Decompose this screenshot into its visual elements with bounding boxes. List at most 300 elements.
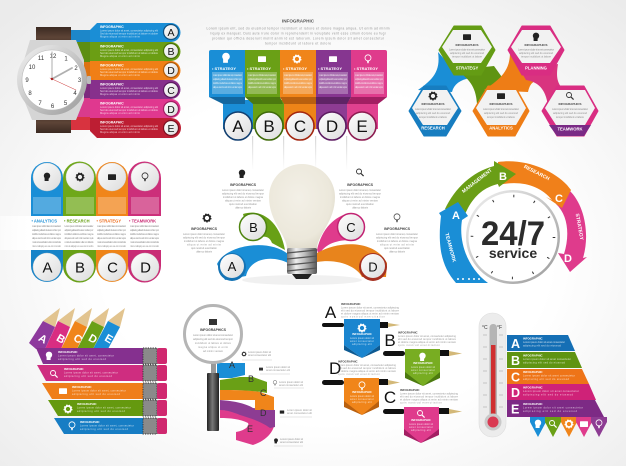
hexagon strategy: INFOGRAPHICS xyxy=(455,43,479,47)
thermometer body xyxy=(479,313,506,437)
text block bulb xyxy=(376,214,418,254)
ribbon B: B xyxy=(249,220,258,235)
column E: • STRATEGY xyxy=(354,66,378,71)
column C: Lorem ipsum dolor sit amet, consectetur xyxy=(284,73,312,77)
column A: • STRATEGY xyxy=(212,66,236,71)
band text: Lorem ipsum dolor sit amet consectetur xyxy=(97,224,126,228)
text block A xyxy=(341,302,400,318)
hexagon planning: tempor incididunt ut labore xyxy=(521,54,552,58)
column D: Lorem ipsum dolor sit amet, consectetur xyxy=(319,73,347,77)
watch dial numbers: 2 xyxy=(74,66,78,72)
band headings: • TEAMWORK xyxy=(129,218,156,224)
text block bulb: incididunt ut labore et dolore magna xyxy=(377,239,418,243)
watch dial numbers: 11 xyxy=(38,56,45,62)
pink ribbon D: INFOGRAPHIC xyxy=(100,102,124,106)
fading shadows below tabs xyxy=(252,136,347,170)
watch dial numbers: 9 xyxy=(25,78,29,84)
hexagon research: RESEARCH xyxy=(421,126,445,130)
letter badges: D xyxy=(167,65,175,77)
intro text: tempor incididunt ut labore et dolore xyxy=(265,42,331,46)
hexagon research: Lorem ipsum dolor sit amet consectetur xyxy=(415,107,451,111)
column C: aliqua ut enim ad minim veniam quis xyxy=(284,85,313,89)
band text xyxy=(32,224,160,248)
ribbon E: E xyxy=(511,402,519,416)
text block A: elit sed do eiusmod tempor incididunt ut labore xyxy=(341,308,400,312)
ribbon green xyxy=(220,377,267,393)
text block B: quis nostrud exercitation xyxy=(398,343,441,347)
banner C: Lorem ipsum dolor sit xyxy=(409,422,433,426)
label 5: Lorem ipsum dolor sit xyxy=(280,437,303,441)
panel: magnifier with stepped ribbons xyxy=(184,306,312,446)
banner B: Lorem ipsum dolor sit xyxy=(411,365,435,369)
ribbon A xyxy=(507,335,575,351)
hexagon teamwork: INFOGRAPHICS xyxy=(558,102,582,106)
ribbon letters xyxy=(229,360,267,434)
label 4 xyxy=(280,408,312,417)
letter D: D xyxy=(329,359,341,378)
orange ribbon D xyxy=(90,61,180,80)
text block gear xyxy=(183,214,225,254)
hexagon analytics: Lorem ipsum dolor sit amet consectetur xyxy=(483,107,519,111)
ribbon A xyxy=(217,245,288,281)
band text: nisi ut aliquip ex ea commodo xyxy=(130,244,160,248)
text block C: INFOGRAPHIC xyxy=(400,388,420,392)
ribbon letters: C xyxy=(260,388,267,398)
ribbon B xyxy=(507,352,582,368)
ribbon E xyxy=(507,400,604,417)
label 5: amet consectetur elit xyxy=(280,440,303,444)
letters xyxy=(42,260,151,276)
band text: nostrud exercitation ullamco laboris xyxy=(64,240,94,244)
bar orange xyxy=(42,383,143,399)
pen C xyxy=(383,408,462,414)
metal ferrules xyxy=(143,348,157,434)
orange ribbon D: Magna aliqua ut enim ad minim xyxy=(100,73,140,77)
banner D: amet consectetur xyxy=(350,397,374,401)
text block C: quis nostrud exercitation xyxy=(400,400,443,404)
bar green: INFOGRAPHIC xyxy=(77,402,97,406)
pink ribbon D: Lorem ipsum dolor sit amet, consectetur adipiscing elit xyxy=(100,105,158,109)
ribbon research C: C xyxy=(555,193,563,205)
watch dial numbers xyxy=(25,54,82,110)
text block C: et dolore magna aliqua ut enim ad minim veniam xyxy=(400,398,458,402)
band text: aliqua ut enim ad minim veniam quis xyxy=(64,236,94,240)
pill text blocks xyxy=(33,197,159,214)
text block A: quis nostrud exercitation xyxy=(341,314,386,318)
text block C: Lorem ipsum dolor sit amet, consectetur adipiscing xyxy=(400,392,459,396)
band text: adipiscing elit sed do eiusmod tempor xyxy=(130,228,159,232)
ribbon orange xyxy=(220,390,274,410)
text block B xyxy=(398,330,457,347)
ribbon A: A xyxy=(228,259,237,274)
band text: aliqua ut enim ad minim veniam quis xyxy=(130,236,160,240)
ribbon purple xyxy=(220,400,275,428)
ribbon letters: B xyxy=(248,374,254,384)
pencil D: D xyxy=(86,332,99,347)
text block B: et dolore magna aliqua ut enim ad minim veniam xyxy=(398,340,456,344)
ribbon D: INFOGRAPHIC xyxy=(523,386,543,390)
band text: aliqua ut enim ad minim veniam quis xyxy=(32,236,62,240)
band text: Lorem ipsum dolor sit amet consectetur xyxy=(130,224,159,228)
band text: nisi ut aliquip ex ea commodo xyxy=(32,244,62,248)
orange ribbon D: INFOGRAPHIC xyxy=(100,64,124,68)
letters: D xyxy=(140,260,151,276)
label 4: amet consectetur elit xyxy=(287,411,312,415)
bulb glass xyxy=(269,164,335,249)
bar blue: Lorem ipsum dolor sit amet, consectetur xyxy=(80,424,134,428)
text block gear: ullamco laboris xyxy=(196,250,213,254)
orange ribbon D: Lorem ipsum dolor sit amet, consectetur adipiscing elit xyxy=(100,67,158,71)
ribbon D: D xyxy=(368,260,378,274)
banner C xyxy=(404,407,439,443)
text block B: Lorem ipsum dolor sit amet, consectetur adipiscing xyxy=(398,334,457,338)
orange ribbon D: Sed do eiusmod tempor incididunt ut labore et dolore xyxy=(100,70,159,74)
intro text: proiden qui officia deserunt mollit anim id est laborum. Lorem ipsum dolor sit amet consectetur xyxy=(212,36,385,40)
bar orange: Lorem ipsum dolor sit amet, consectetur xyxy=(72,388,126,392)
band headings: • RESEARCH xyxy=(64,218,90,224)
bar pink: Lorem ipsum dolor sit amet, consectetur xyxy=(64,370,118,374)
text block gear: aliqua ut enim ad minim xyxy=(187,242,221,246)
letters: C xyxy=(107,260,118,276)
hexagon strategy: tempor incididunt ut labore xyxy=(452,54,483,58)
column folds xyxy=(209,97,387,104)
blue ribbon A: Lorem ipsum dolor sit amet, consectetur adipiscing elit xyxy=(100,28,158,32)
ribbon strategy D xyxy=(556,190,587,272)
ribbon E: INFOGRAPHIC xyxy=(523,402,543,406)
ribbon C: C xyxy=(346,220,356,235)
letters: B xyxy=(263,117,275,136)
text block gear: adipiscing elit sed do eiusmod tempor xyxy=(183,236,225,240)
bar purple: INFOGRAPHIC xyxy=(58,350,78,354)
bar blue: INFOGRAPHIC xyxy=(80,420,100,424)
ribbon C: Lorem ipsum dolor sit amet consectetur xyxy=(523,374,575,378)
bulb screw base xyxy=(287,248,317,279)
text block A: Lorem ipsum dolor sit amet, consectetur adipiscing xyxy=(341,306,400,310)
magnifier lens xyxy=(184,306,242,362)
ribbon B: B xyxy=(511,354,520,368)
band text: adipiscing elit sed do eiusmod tempor xyxy=(32,228,61,232)
magnifier lens: magna aliqua ut enim xyxy=(198,345,228,349)
lower tabs xyxy=(223,100,378,129)
watch dial numbers: 7 xyxy=(38,101,42,107)
red ribbon E: Magna aliqua ut enim ad minim xyxy=(100,130,140,134)
label 5 xyxy=(274,437,303,446)
hexagon teamwork xyxy=(542,86,598,136)
text block magnifier: Lorem ipsum dolor sit amet, consectetur xyxy=(339,188,381,192)
hexagon strategy: STRATEGY xyxy=(456,66,478,70)
letter B: B xyxy=(384,331,396,350)
column A: adipiscing elit sed do eiusmod tempor xyxy=(213,77,242,81)
ribbon A: adipiscing elit sed do eiusmod xyxy=(523,344,562,348)
hexagon strategy: adipiscing elit sed do eiusmod xyxy=(450,51,485,55)
letters: A xyxy=(42,260,53,276)
text block bulb: adipiscing elit sed do eiusmod tempor xyxy=(376,236,418,240)
text block D: INFOGRAPHIC xyxy=(338,360,358,364)
letter A: A xyxy=(325,303,337,322)
banner A: amet consectetur xyxy=(350,339,374,343)
ribbon research C xyxy=(498,161,571,208)
ribbon C xyxy=(507,369,589,384)
letter circles xyxy=(224,112,376,140)
ribbon strategy D: STRATEGY xyxy=(574,213,584,241)
band headings xyxy=(32,218,156,224)
letter badges: D xyxy=(167,104,175,116)
text block magnifier: adipiscing elit sed do eiusmod tempor xyxy=(339,192,381,196)
column C xyxy=(280,50,316,97)
blue ribbon A: Sed do eiusmod tempor incididunt ut labore et dolore xyxy=(100,32,159,36)
hexagon teamwork: adipiscing elit sed do eiusmod xyxy=(553,111,588,115)
ribbon E: Lorem ipsum dolor sit amet consectetur xyxy=(523,406,583,410)
bar pink xyxy=(37,365,143,381)
text block D: et dolore magna aliqua ut enim ad minim veniam xyxy=(338,369,396,373)
text block D: quis nostrud exercitation xyxy=(338,372,381,376)
ribbon A: INFOGRAPHIC xyxy=(523,336,543,340)
ribbon B: Lorem ipsum dolor sit amet consectetur xyxy=(523,357,571,361)
text block D: elit sed do eiusmod tempor incididunt ut labore xyxy=(338,366,397,370)
banner B: adipiscing elit xyxy=(413,371,433,375)
ribbon teamwork A xyxy=(439,202,488,283)
band text: nisi ut aliquip ex ea commodo xyxy=(64,244,94,248)
label 1 xyxy=(242,350,272,360)
label 2 xyxy=(259,365,290,374)
panel: thermometer with ribbons xyxy=(479,313,607,437)
hexagon strategy: Lorem ipsum dolor sit amet consectetur xyxy=(449,48,485,52)
column D: adipiscing elit sed do eiusmod tempor xyxy=(319,77,347,81)
label 2: Lorem ipsum dolor sit xyxy=(266,365,290,369)
hexagon planning: Lorem ipsum dolor sit amet consectetur xyxy=(518,48,554,52)
purple ribbon C: Lorem ipsum dolor sit amet, consectetur adipiscing elit xyxy=(100,86,158,90)
banner C: INFOGRAPHIC xyxy=(411,418,431,422)
text block D: Lorem ipsum dolor sit amet, consectetur adipiscing xyxy=(338,363,397,367)
watch dial numbers: 12 xyxy=(50,54,57,60)
ribbon B xyxy=(240,213,285,250)
banner A: adipiscing elit xyxy=(352,342,372,346)
text block head: Lorem ipsum dolor sit amet, consectetur xyxy=(222,188,264,192)
banner A xyxy=(344,319,380,358)
label 1: amet consectetur elit xyxy=(248,353,271,357)
watch dial numbers: 3 xyxy=(78,78,82,84)
band text: nisi ut aliquip ex ea commodo xyxy=(97,244,127,248)
text block head: aliqua ut enim ad minim veniam xyxy=(225,198,261,202)
text block gear: quis nostrud exercitation xyxy=(191,246,218,250)
ribbon D: adipiscing elit sed do eiusmod xyxy=(523,392,574,396)
band text: incididunt ut labore et dolore magna xyxy=(97,232,127,236)
letter C: C xyxy=(384,388,396,407)
ribbon D: D xyxy=(511,386,520,400)
ribbon management B: MANAGEMENT xyxy=(461,168,494,195)
ribbon D: Lorem ipsum dolor sit amet consectetur xyxy=(523,389,579,393)
label 3: Lorem ipsum dolor sit xyxy=(279,380,303,384)
banner C: adipiscing elit xyxy=(411,428,431,432)
panel: 24/7 clock xyxy=(439,161,587,284)
watch straps xyxy=(36,27,71,133)
banner A: Lorem ipsum dolor sit xyxy=(350,336,374,340)
text block bulb: Lorem ipsum dolor sit amet, consectetur xyxy=(376,232,418,236)
green ribbon B: Lorem ipsum dolor sit amet, consectetur adipiscing elit xyxy=(100,48,158,52)
text block B: elit sed do eiusmod tempor incididunt ut labore xyxy=(398,337,457,341)
panel: strategy columns xyxy=(206,18,390,170)
column B: Lorem ipsum dolor sit amet, consectetur xyxy=(248,73,276,77)
banner A: INFOGRAPHIC xyxy=(352,332,372,336)
text block A: INFOGRAPHIC xyxy=(341,302,361,306)
pink ribbon D: Sed do eiusmod tempor incididunt ut labore et dolore xyxy=(100,108,159,112)
scale labels: °F xyxy=(497,325,502,331)
letters: E xyxy=(356,117,368,136)
pins xyxy=(530,417,607,437)
letter badges: E xyxy=(167,123,175,135)
text block magnifier: incididunt ut labore et dolore magna xyxy=(340,195,381,199)
hexagon strategy xyxy=(439,26,495,75)
label 2: amet consectetur elit xyxy=(266,368,290,372)
purple ribbon C: INFOGRAPHIC xyxy=(100,82,124,86)
purple ribbon C: Sed do eiusmod tempor incididunt ut labore et dolore xyxy=(100,89,159,93)
bar orange: adipiscing elit sed do eiusmod xyxy=(72,392,121,396)
band text: Lorem ipsum dolor sit amet consectetur xyxy=(32,224,61,228)
letters xyxy=(232,117,368,136)
text block bulb: aliqua ut enim ad minim xyxy=(380,242,414,246)
banner D: Lorem ipsum dolor sit xyxy=(350,394,374,398)
letters: C xyxy=(294,117,306,136)
column B: • STRATEGY xyxy=(247,66,271,71)
column E xyxy=(351,50,387,97)
letters: D xyxy=(326,117,338,136)
magnifier lens: adipiscing elit sed do eiusmod tempor xyxy=(193,337,233,341)
white band xyxy=(0,216,190,250)
bar purple xyxy=(36,348,143,364)
blue ribbon A: INFOGRAPHIC xyxy=(100,25,124,29)
band headings: • STRATEGY xyxy=(96,218,121,224)
letter badges xyxy=(164,24,178,136)
hexagon research: INFOGRAPHICS xyxy=(421,102,445,106)
bar blue xyxy=(54,418,143,434)
text block head: ullamco laboris xyxy=(235,206,252,210)
ribbon D xyxy=(317,244,387,281)
hexagon teamwork: tempor incididunt ut labore xyxy=(556,115,585,119)
intro text: liquip ex marquat. Duis aute irure dolor in reprehenderit in voluptate velit esse cillum dolore eu fugi xyxy=(210,32,386,36)
text block magnifier: INFOGRAPHICS xyxy=(347,183,374,187)
watch dial numbers: 5 xyxy=(64,101,68,107)
band text: aliqua ut enim ad minim veniam quis xyxy=(97,236,127,240)
pencil B: B xyxy=(54,332,67,347)
column D: aliqua ut enim ad minim veniam quis xyxy=(319,85,348,89)
label 4: Lorem ipsum dolor sit xyxy=(287,408,312,412)
ribbon blue xyxy=(217,363,245,378)
text block gear: Lorem ipsum dolor sit amet, consectetur xyxy=(183,232,225,236)
green ribbon B: Sed do eiusmod tempor incididunt ut labore et dolore xyxy=(100,51,159,55)
band text: nostrud exercitation ullamco laboris xyxy=(32,240,62,244)
band text: adipiscing elit sed do eiusmod tempor xyxy=(97,228,126,232)
magnifier lens: incididunt ut labore et dolore xyxy=(195,341,232,345)
column A: aliqua ut enim ad minim veniam quis xyxy=(213,85,243,89)
hexagon planning: PLANNING xyxy=(525,66,547,70)
banner B: INFOGRAPHIC xyxy=(413,361,433,365)
ribbon C xyxy=(317,213,364,255)
text block C xyxy=(400,388,459,404)
red ribbon E: Sed do eiusmod tempor incididunt ut labore et dolore xyxy=(100,127,159,131)
hexagon research: adipiscing elit sed do eiusmod xyxy=(416,111,451,115)
letters: A xyxy=(232,117,244,136)
ribbon letters: E xyxy=(247,424,253,434)
text block head: quis nostrud exercitation xyxy=(229,202,258,206)
text block B: INFOGRAPHIC xyxy=(398,330,418,334)
bar blue: adipiscing elit sed do eiusmod xyxy=(80,427,129,431)
intro text xyxy=(206,26,390,46)
hexagon analytics: ANALYTICS xyxy=(489,126,513,130)
column C: incididunt ut labore et dolore magna xyxy=(284,81,313,85)
banner C: amet consectetur xyxy=(409,425,433,429)
bar green xyxy=(48,400,143,416)
text block head: adipiscing elit sed do eiusmod tempor xyxy=(222,192,264,196)
column D: incididunt ut labore et dolore magna xyxy=(319,81,348,85)
ribbon backs xyxy=(71,30,90,130)
panel: four pill columns xyxy=(0,162,190,282)
pencil A: A xyxy=(36,332,49,347)
ribbon management B xyxy=(445,161,516,218)
bar orange: INFOGRAPHIC xyxy=(72,385,92,389)
column B: aliqua ut enim ad minim veniam quis xyxy=(248,85,277,89)
band text: incididunt ut labore et dolore magna xyxy=(32,232,62,236)
column B xyxy=(245,50,280,97)
magnifier lens: Lorem ipsum dolor sit amet consectetur xyxy=(193,333,233,337)
hexagon analytics: INFOGRAPHICS xyxy=(489,102,513,106)
hexagon research xyxy=(409,86,461,136)
ribbon B: adipiscing elit sed do eiusmod xyxy=(523,360,566,364)
pen A xyxy=(322,322,400,328)
ribbon strategy D: D xyxy=(564,253,572,265)
panel: pens with banners xyxy=(322,302,462,443)
ribbon B: INFOGRAPHIC xyxy=(523,354,543,358)
band text: adipiscing elit sed do eiusmod tempor xyxy=(64,228,94,232)
hexagon planning: adipiscing elit sed do eiusmod xyxy=(519,51,554,55)
pink ribbon D xyxy=(90,99,180,118)
bar pink: INFOGRAPHIC xyxy=(64,367,84,371)
text block bulb: INFOGRAPHICS xyxy=(384,227,411,231)
ribbon letters: A xyxy=(229,360,235,370)
label 3: amet consectetur elit xyxy=(279,383,303,387)
pen D xyxy=(322,379,400,385)
text block head: incididunt ut labore et dolore magna xyxy=(223,195,264,199)
circles with icons xyxy=(33,163,159,281)
ribbon C: INFOGRAPHIC xyxy=(523,370,543,374)
clock face xyxy=(466,190,560,284)
ribbon teamwork A: A xyxy=(452,210,460,222)
column A xyxy=(209,50,245,97)
hexagon analytics: tempor incididunt ut labore xyxy=(487,115,516,119)
hexagon analytics: adipiscing elit sed do eiusmod xyxy=(484,111,519,115)
letter badges: C xyxy=(167,85,175,97)
ribbon letters: D xyxy=(260,408,267,418)
green ribbon B: Magna aliqua ut enim ad minim xyxy=(100,54,140,58)
pen B xyxy=(383,350,462,356)
text block D xyxy=(338,360,397,376)
connecting ribbons xyxy=(418,52,562,108)
erasers xyxy=(157,348,167,434)
bar pink: adipiscing elit sed do eiusmod xyxy=(64,374,113,378)
shadow xyxy=(242,275,362,285)
panel: watch with ribbons xyxy=(17,23,181,138)
text block magnifier: aliqua ut enim ad minim veniam xyxy=(342,198,378,202)
panel: pencils xyxy=(29,308,167,434)
text block C: elit sed do eiusmod tempor incididunt ut labore xyxy=(400,394,459,398)
text block gear: incididunt ut labore et dolore magna xyxy=(184,239,225,243)
hexagon research: tempor incididunt ut labore xyxy=(419,115,448,119)
band text: incididunt ut labore et dolore magna xyxy=(64,232,94,236)
text block magnifier: quis nostrud exercitation xyxy=(346,202,375,206)
watch dial numbers: 1 xyxy=(64,56,68,62)
watch hands xyxy=(50,52,76,90)
panel: light bulb xyxy=(183,164,418,285)
letter badges: B xyxy=(167,46,175,58)
